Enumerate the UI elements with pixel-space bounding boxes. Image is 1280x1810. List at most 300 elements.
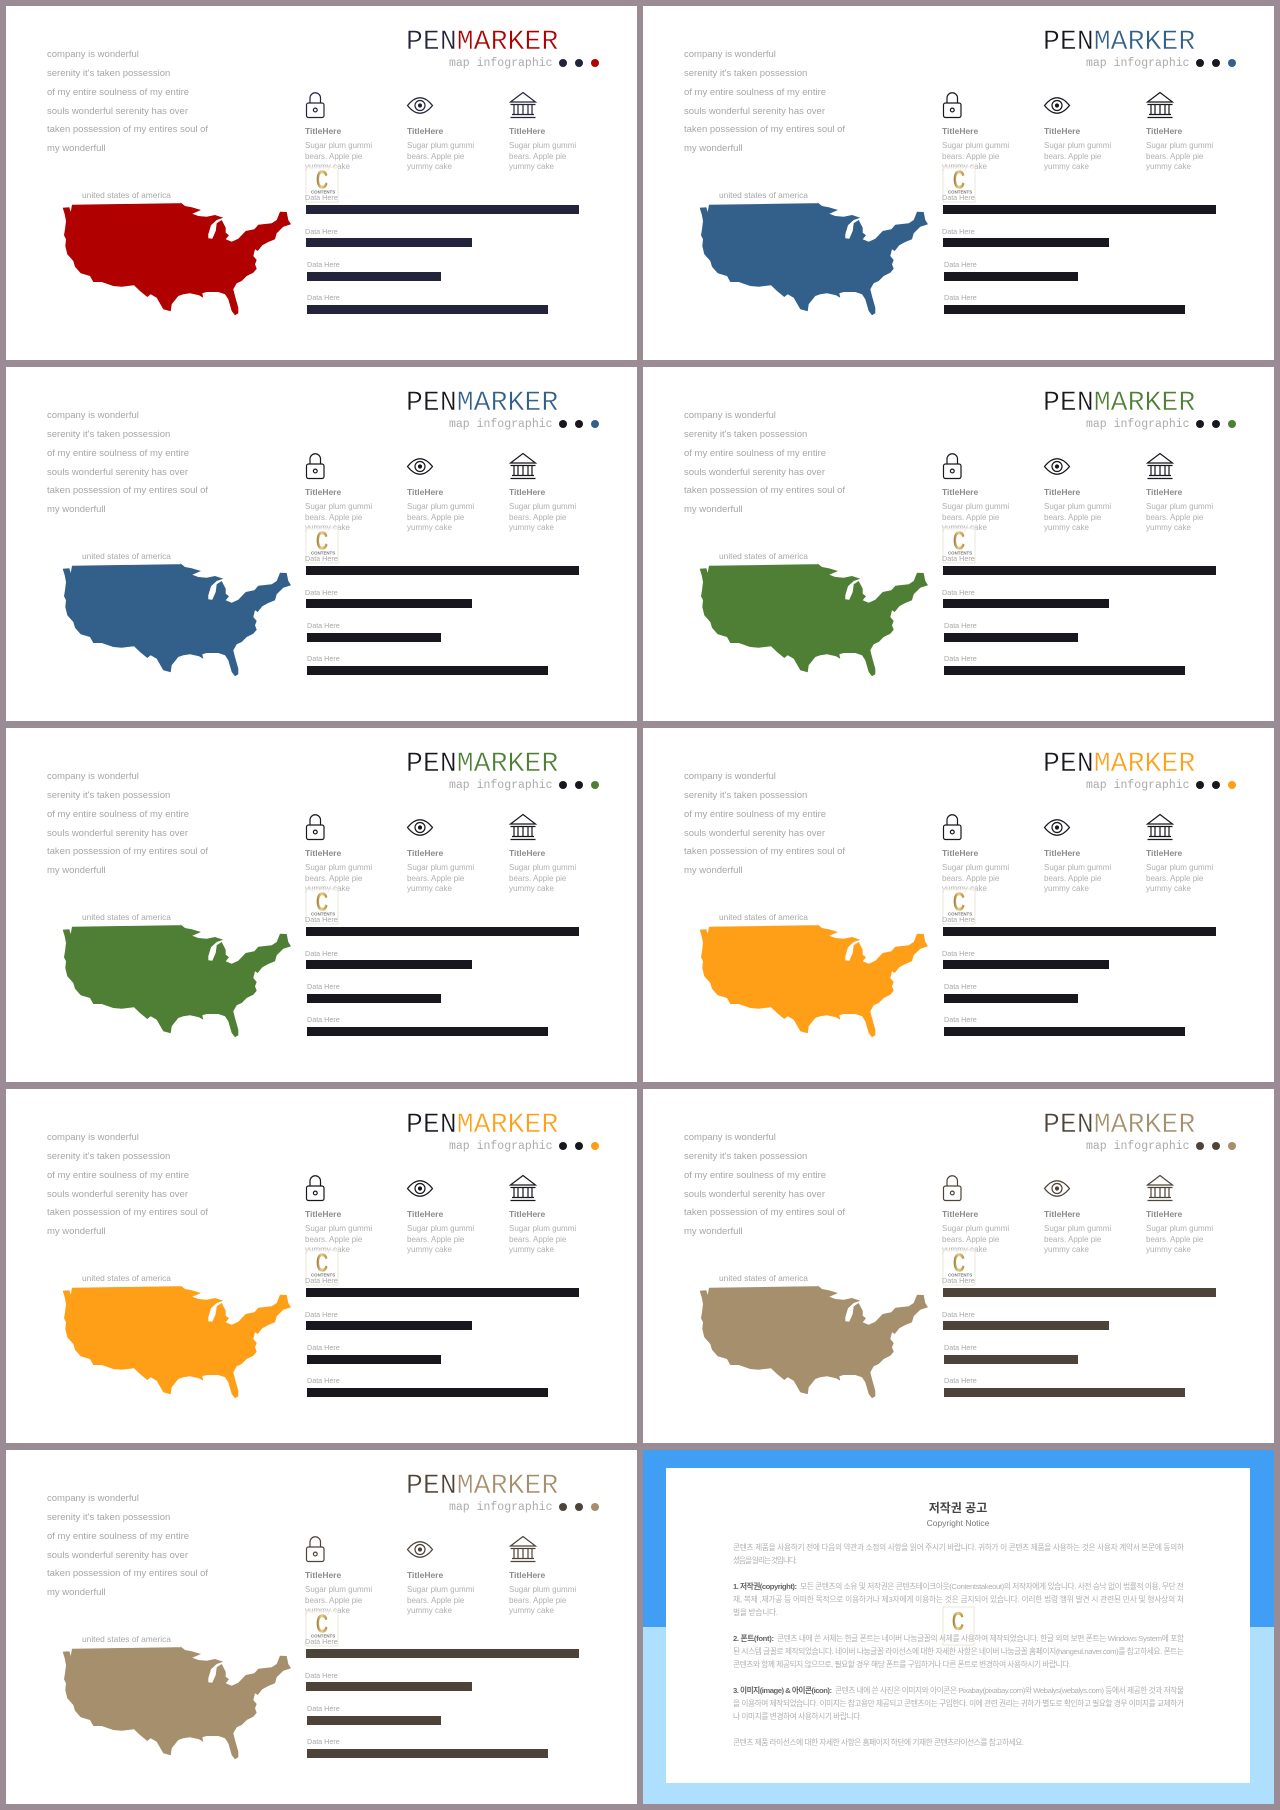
colour dots xyxy=(559,1142,599,1150)
panel: red slide xyxy=(6,6,637,360)
column: lock text: TitleHere xyxy=(305,848,341,858)
intro text: souls wonderful serenity has over xyxy=(47,467,188,478)
column: eye text: Sugar plum gummi xyxy=(407,1585,474,1594)
column: lock text: bears. Apple pie xyxy=(942,874,1000,883)
intro text: serenity it's taken possession xyxy=(684,1151,807,1162)
bar chart: Data Here xyxy=(305,1276,338,1285)
bar chart xyxy=(305,915,579,1036)
column: lock text: yummy cake xyxy=(942,1245,987,1254)
intro text xyxy=(47,1132,208,1237)
intro text: of my entire soulness of my entire xyxy=(684,809,826,820)
icon: lock xyxy=(944,454,961,478)
stamp xyxy=(943,887,975,924)
column: bank text: yummy cake xyxy=(1146,1245,1191,1254)
bar chart: Data Here xyxy=(942,1310,975,1319)
panel: blue slide, left xyxy=(6,367,637,721)
title: PENMARKER xyxy=(1043,749,1195,780)
bar chart: Data Here xyxy=(307,1015,340,1024)
title: PENMARKER xyxy=(406,1110,558,1141)
intro text: of my entire soulness of my entire xyxy=(47,809,189,820)
column: bank text: yummy cake xyxy=(1146,884,1191,893)
column: lock text: bears. Apple pie xyxy=(942,1235,1000,1244)
column: lock text: bears. Apple pie xyxy=(305,874,363,883)
bar chart: Data Here xyxy=(305,588,338,597)
bar chart xyxy=(305,554,579,675)
intro text: serenity it's taken possession xyxy=(684,68,807,79)
icon: bank xyxy=(1148,814,1172,840)
map label: united states of america xyxy=(82,1273,171,1283)
column: bank text: yummy cake xyxy=(509,162,554,171)
bar chart: Data Here xyxy=(305,949,338,958)
notice section 1 xyxy=(733,1581,1184,1617)
column: bank text: yummy cake xyxy=(1146,162,1191,171)
bar chart: Data Here xyxy=(942,227,975,236)
subtitle: map infographic xyxy=(1086,1140,1190,1153)
column: lock text: TitleHere xyxy=(305,1570,341,1580)
bar chart: Data Here xyxy=(942,193,975,202)
map label: united states of america xyxy=(82,1634,171,1644)
intro text: taken possession of my entires soul of xyxy=(684,846,845,857)
column: lock text: yummy cake xyxy=(305,523,350,532)
map label: united states of america xyxy=(719,190,808,200)
icon: bank xyxy=(1148,92,1172,118)
column: eye text: TitleHere xyxy=(407,1570,443,1580)
column: lock text xyxy=(305,848,372,893)
column: lock text: yummy cake xyxy=(942,523,987,532)
bar chart: Data Here xyxy=(944,1376,977,1385)
bar chart: Data Here xyxy=(942,554,975,563)
subtitle: map infographic xyxy=(449,1140,553,1153)
column: bank text: yummy cake xyxy=(509,884,554,893)
column: lock text: yummy cake xyxy=(305,884,350,893)
bar chart xyxy=(305,1637,579,1758)
stamp: CONTENTS xyxy=(311,1272,335,1278)
intro text: souls wonderful serenity has over xyxy=(684,106,825,117)
bar chart: Data Here xyxy=(307,1737,340,1746)
map: united states xyxy=(700,1285,928,1398)
column: eye text: bears. Apple pie xyxy=(407,152,465,161)
column: bank text xyxy=(509,487,576,532)
icon: lock xyxy=(944,1176,961,1200)
column: eye text: yummy cake xyxy=(1044,884,1089,893)
icon: eye xyxy=(408,820,432,835)
column: lock text: yummy cake xyxy=(942,162,987,171)
column: lock text: bears. Apple pie xyxy=(305,1596,363,1605)
intro text: taken possession of my entires soul of xyxy=(47,1568,208,1579)
column: eye text xyxy=(1044,126,1111,171)
column: lock text: TitleHere xyxy=(305,1209,341,1219)
stamp: CONTENTS xyxy=(311,1634,335,1638)
intro text: souls wonderful serenity has over xyxy=(47,1189,188,1200)
intro text: my wonderfull xyxy=(684,143,743,154)
column: bank text: TitleHere xyxy=(1146,487,1182,497)
column: bank text xyxy=(509,126,576,171)
column: bank text: Sugar plum gummi xyxy=(509,502,576,511)
stamp xyxy=(943,1606,974,1645)
icon: bank xyxy=(510,1176,536,1200)
intro text: serenity it's taken possession xyxy=(684,790,807,801)
intro text: serenity it's taken possession xyxy=(47,790,170,801)
column: eye text: bears. Apple pie xyxy=(1044,152,1102,161)
column: bank text: bears. Apple pie xyxy=(509,1235,567,1244)
column: bank text: bears. Apple pie xyxy=(1146,152,1204,161)
icon: eye xyxy=(408,1542,432,1557)
map label: united states of america xyxy=(82,551,171,561)
column: lock text: bears. Apple pie xyxy=(942,513,1000,522)
icon: bank xyxy=(510,92,536,118)
stamp xyxy=(943,165,975,202)
colour dots xyxy=(1196,781,1236,789)
column: bank text: Sugar plum gummi xyxy=(509,1585,576,1594)
icon: eye xyxy=(408,1181,432,1196)
map: united states xyxy=(63,1646,291,1759)
column: eye text: bears. Apple pie xyxy=(407,513,465,522)
notice intro: 콘텐츠 제품을 사용하기 전에 다음의 약관과 소정의 사항을 읽어 주시기 바랍니다. 귀하가 이 콘텐츠 제품을 사용하는 것은 사용자 계약서 본문에 동의하 xyxy=(733,1542,1184,1552)
bar chart xyxy=(942,915,1216,1036)
column: bank text: TitleHere xyxy=(1146,848,1182,858)
intro text: my wonderfull xyxy=(47,1587,106,1598)
intro text xyxy=(684,49,845,154)
stamp: C xyxy=(316,887,328,916)
bar chart: Data Here xyxy=(942,588,975,597)
column: lock text: TitleHere xyxy=(305,487,341,497)
bar chart: Data Here xyxy=(305,227,338,236)
intro text: company is wonderful xyxy=(684,410,776,421)
intro text: souls wonderful serenity has over xyxy=(684,828,825,839)
column: bank text: yummy cake xyxy=(509,523,554,532)
column: eye text: yummy cake xyxy=(407,884,452,893)
column: bank text: TitleHere xyxy=(509,1209,545,1219)
intro text: company is wonderful xyxy=(47,410,139,421)
intro text xyxy=(47,410,208,515)
icon: lock xyxy=(306,1537,324,1562)
column: bank text: bears. Apple pie xyxy=(509,513,567,522)
column: bank text: Sugar plum gummi xyxy=(1146,502,1213,511)
icon: eye xyxy=(1044,1181,1070,1196)
intro text: of my entire soulness of my entire xyxy=(684,1170,826,1181)
icon: bank xyxy=(510,1536,536,1562)
bar chart: Data Here xyxy=(307,982,340,991)
column: eye text: yummy cake xyxy=(1044,523,1089,532)
intro text: of my entire soulness of my entire xyxy=(47,1531,189,1542)
column: bank text: yummy cake xyxy=(1146,523,1191,532)
stamp xyxy=(306,1248,338,1285)
notice section 3: 나 이미지를 변경하여 사용하시기 바랍니다. xyxy=(733,1711,862,1721)
intro text: of my entire soulness of my entire xyxy=(47,1170,189,1181)
column: bank text xyxy=(1146,126,1213,171)
column: eye text: TitleHere xyxy=(407,126,443,136)
column: eye text: TitleHere xyxy=(1044,848,1080,858)
map: united states xyxy=(63,563,291,676)
stamp: C xyxy=(952,1606,964,1636)
column: eye text: yummy cake xyxy=(1044,1245,1089,1254)
bar chart: Data Here xyxy=(307,1343,340,1352)
column: lock text: Sugar plum gummi xyxy=(305,863,372,872)
column: lock text xyxy=(942,126,1009,171)
intro text: company is wonderful xyxy=(47,1132,139,1143)
notice section 3: 을 이용하여 제작되었습니다. 이미지는 참고용만 제공되고 콘텐츠이는 구입한다. 이에 관련 권리는 귀하가 별도로 확인하고 필요할 경우 이미지를 교체하거 xyxy=(733,1698,1184,1708)
column: eye text: bears. Apple pie xyxy=(407,1235,465,1244)
icon: eye xyxy=(408,98,432,113)
intro text: of my entire soulness of my entire xyxy=(684,448,826,459)
icon: bank xyxy=(510,814,536,840)
bar chart: Data Here xyxy=(307,293,340,302)
panel: green slide, left xyxy=(6,728,637,1082)
column: eye text xyxy=(407,1570,474,1615)
bar chart xyxy=(942,554,1216,675)
column: bank text: bears. Apple pie xyxy=(509,152,567,161)
column: lock text xyxy=(942,848,1009,893)
column: bank text: bears. Apple pie xyxy=(509,1596,567,1605)
column: bank text: TitleHere xyxy=(1146,1209,1182,1219)
bar chart: Data Here xyxy=(944,260,977,269)
bar chart: Data Here xyxy=(942,949,975,958)
column: bank text: yummy cake xyxy=(509,1606,554,1615)
column: eye text xyxy=(1044,1209,1111,1254)
intro text: my wonderfull xyxy=(47,504,106,515)
panel: orange slide, right xyxy=(643,728,1274,1082)
intro text: taken possession of my entires soul of xyxy=(684,124,845,135)
colour dots xyxy=(559,420,599,428)
stamp: C xyxy=(953,887,965,916)
notice section 2: 2. 폰트(font): xyxy=(733,1634,774,1643)
column: eye text: Sugar plum gummi xyxy=(407,141,474,150)
icon: eye xyxy=(1044,459,1070,474)
notice closing line: 콘텐츠 제품 라이선스에 대한 자세한 사항은 홈페이지 하단에 기재한 콘텐츠라이선스를 참고하세요. xyxy=(733,1737,1024,1747)
bar chart xyxy=(305,1276,579,1397)
bar chart: Data Here xyxy=(944,654,977,663)
notice subheading: Copyright Notice xyxy=(927,1518,990,1528)
map: united states xyxy=(700,563,928,676)
column: eye text: bears. Apple pie xyxy=(407,1596,465,1605)
column: bank text: TitleHere xyxy=(509,848,545,858)
notice heading: 저작권 공고 xyxy=(929,1500,987,1515)
intro text: my wonderfull xyxy=(684,865,743,876)
map label: united states of america xyxy=(719,1273,808,1283)
intro text: serenity it's taken possession xyxy=(47,68,170,79)
map: united states xyxy=(700,202,928,315)
column: eye text: TitleHere xyxy=(1044,487,1080,497)
intro text: taken possession of my entires soul of xyxy=(684,485,845,496)
panel: tan slide, right xyxy=(643,1089,1274,1443)
column: eye text: yummy cake xyxy=(407,162,452,171)
stamp xyxy=(943,526,975,563)
column: bank text: Sugar plum gummi xyxy=(1146,863,1213,872)
notice section 2: 된 시스템 글꼴로 제작되었습니다. 네이버 나눔글꼴 라이선스에 대한 자세한 사항은 네이버 나눔글꼴 홈페이지(hangeul.naver.com)를 참고하세요. 폰트는 xyxy=(733,1646,1184,1656)
column: bank text: Sugar plum gummi xyxy=(509,863,576,872)
column: lock text: yummy cake xyxy=(305,162,350,171)
intro text: my wonderfull xyxy=(47,143,106,154)
colour dots xyxy=(1196,1142,1236,1150)
icon: lock xyxy=(944,93,961,118)
map label: united states of america xyxy=(82,190,171,200)
stamp: CONTENTS xyxy=(311,190,335,194)
bar chart: Data Here xyxy=(307,260,340,269)
stamp: C xyxy=(953,1248,965,1277)
bar chart: Data Here xyxy=(944,1015,977,1024)
column: bank text xyxy=(509,1209,576,1254)
column: lock text: bears. Apple pie xyxy=(942,152,1000,161)
intro text: my wonderfull xyxy=(684,504,743,515)
stamp xyxy=(306,1609,338,1646)
column: eye text: bears. Apple pie xyxy=(1044,1235,1102,1244)
title: PENMARKER xyxy=(406,388,558,419)
bar chart: Data Here xyxy=(305,1671,338,1680)
colour dots xyxy=(559,1503,599,1511)
subtitle: map infographic xyxy=(1086,418,1190,431)
bar chart: Data Here xyxy=(942,1276,975,1285)
column: lock text xyxy=(942,1209,1009,1254)
intro text: taken possession of my entires soul of xyxy=(47,485,208,496)
column: eye text xyxy=(1044,848,1111,893)
subtitle: map infographic xyxy=(1086,779,1190,792)
icon: eye xyxy=(1044,98,1070,113)
intro text: souls wonderful serenity has over xyxy=(684,467,825,478)
map label: united states of america xyxy=(82,912,171,922)
column: lock text xyxy=(305,487,372,532)
column: bank text: TitleHere xyxy=(509,126,545,136)
title: PENMARKER xyxy=(1043,388,1195,419)
column: lock text: TitleHere xyxy=(942,1209,978,1219)
intro text xyxy=(684,1132,845,1237)
stamp xyxy=(306,165,338,202)
intro text: company is wonderful xyxy=(684,1132,776,1143)
notice section 3: 3. 이미지(image) & 아이콘(icon): xyxy=(733,1685,832,1695)
intro text: company is wonderful xyxy=(47,1493,139,1504)
icon: lock xyxy=(944,815,961,840)
column: bank text: Sugar plum gummi xyxy=(1146,1224,1213,1233)
bar chart: Data Here xyxy=(307,654,340,663)
column: eye text: yummy cake xyxy=(407,1606,452,1615)
icon: lock xyxy=(306,815,324,840)
notice section 1: 모든 콘텐츠의 소유 및 저작권은 콘텐츠테이크아웃(Contentstakeout)의 저작자에게 있습니다. 사전 승낙 없이 법률적 이용, 무단 전 xyxy=(800,1581,1184,1591)
intro text: of my entire soulness of my entire xyxy=(684,87,826,98)
column: lock text: TitleHere xyxy=(305,126,341,136)
bar chart: Data Here xyxy=(305,554,338,563)
stamp: CONTENTS xyxy=(311,550,335,556)
column: eye text: yummy cake xyxy=(407,523,452,532)
title: PENMARKER xyxy=(406,749,558,780)
intro text: my wonderfull xyxy=(684,1226,743,1237)
column: eye text xyxy=(1044,487,1111,532)
bar chart xyxy=(305,193,579,314)
title: PENMARKER xyxy=(406,1471,558,1502)
subtitle: map infographic xyxy=(1086,57,1190,70)
bar chart: Data Here xyxy=(307,1376,340,1385)
stamp: CONTENTS xyxy=(311,912,335,916)
column: lock text: TitleHere xyxy=(942,848,978,858)
notice section 2 xyxy=(733,1633,1184,1669)
column: lock text: Sugar plum gummi xyxy=(305,1224,372,1233)
icon: lock xyxy=(306,93,324,118)
icon: eye xyxy=(408,459,432,474)
intro text: souls wonderful serenity has over xyxy=(47,1550,188,1561)
column: eye text: Sugar plum gummi xyxy=(1044,141,1111,150)
intro text xyxy=(47,1493,208,1598)
intro text: company is wonderful xyxy=(47,49,139,60)
notice section 2: 콘텐츠 내에 쓴 서체는 한글 폰트는 네이버 나눔글꼴의 서체를 사용하여 제작되었습니다. 한글 외의 보편 폰트는 Windows System에 포함 xyxy=(777,1633,1184,1643)
intro text xyxy=(47,49,208,154)
stamp: CONTENTS xyxy=(948,1272,972,1278)
bar chart: Data Here xyxy=(307,1704,340,1713)
notice intro: 셨음을 알리는 것입니다. xyxy=(733,1555,797,1565)
intro text: of my entire soulness of my entire xyxy=(47,87,189,98)
column: eye text: Sugar plum gummi xyxy=(1044,502,1111,511)
column: lock text: Sugar plum gummi xyxy=(942,1224,1009,1233)
notice section 1: 벌을 받습니다. xyxy=(733,1607,778,1617)
column: eye text xyxy=(407,126,474,171)
stamp xyxy=(306,526,338,563)
colour dots xyxy=(1196,420,1236,428)
column: bank text xyxy=(509,848,576,893)
column: bank text: bears. Apple pie xyxy=(1146,1235,1204,1244)
intro text xyxy=(47,771,208,876)
map label: united states of america xyxy=(719,551,808,561)
panel: copyright notice xyxy=(643,1450,1274,1804)
stamp xyxy=(306,887,338,924)
column: eye text: bears. Apple pie xyxy=(1044,874,1102,883)
map: united states xyxy=(63,202,291,315)
column: eye text: TitleHere xyxy=(1044,126,1080,136)
column: eye text: TitleHere xyxy=(1044,1209,1080,1219)
column: eye text: Sugar plum gummi xyxy=(1044,1224,1111,1233)
stamp: CONTENTS xyxy=(948,190,972,194)
intro text: company is wonderful xyxy=(684,49,776,60)
column: lock text xyxy=(305,1209,372,1254)
subtitle: map infographic xyxy=(449,779,553,792)
colour dots xyxy=(559,781,599,789)
bar chart: Data Here xyxy=(305,193,338,202)
icon: lock xyxy=(306,1176,324,1200)
column: eye text: Sugar plum gummi xyxy=(407,863,474,872)
notice card xyxy=(666,1468,1250,1783)
column: bank text: TitleHere xyxy=(509,1570,545,1580)
stamp: C xyxy=(316,1248,328,1277)
stamp: C xyxy=(316,1609,328,1638)
title: PENMARKER xyxy=(1043,1110,1195,1141)
column: bank text: TitleHere xyxy=(1146,126,1182,136)
bar chart: Data Here xyxy=(307,621,340,630)
intro text: taken possession of my entires soul of xyxy=(47,1207,208,1218)
panel: blue slide, right xyxy=(643,6,1274,360)
notice section 3 xyxy=(733,1685,1184,1721)
column: bank text: bears. Apple pie xyxy=(509,874,567,883)
intro text: serenity it's taken possession xyxy=(47,1512,170,1523)
bar chart: Data Here xyxy=(944,621,977,630)
column: bank text: Sugar plum gummi xyxy=(1146,141,1213,150)
icon: eye xyxy=(1044,820,1070,835)
column: bank text: TitleHere xyxy=(509,487,545,497)
bar chart: Data Here xyxy=(305,1637,338,1646)
intro text: souls wonderful serenity has over xyxy=(47,828,188,839)
column: bank text: bears. Apple pie xyxy=(1146,874,1204,883)
column: lock text: bears. Apple pie xyxy=(305,513,363,522)
column: bank text: bears. Apple pie xyxy=(1146,513,1204,522)
icon: lock xyxy=(306,454,324,478)
bar chart: Data Here xyxy=(944,982,977,991)
column: lock text: Sugar plum gummi xyxy=(942,141,1009,150)
column: eye text: Sugar plum gummi xyxy=(407,1224,474,1233)
notice intro xyxy=(733,1542,1184,1565)
column: lock text: Sugar plum gummi xyxy=(305,141,372,150)
intro text: souls wonderful serenity has over xyxy=(47,106,188,117)
column: eye text xyxy=(407,487,474,532)
intro text: of my entire soulness of my entire xyxy=(47,448,189,459)
intro text xyxy=(684,771,845,876)
column: eye text: yummy cake xyxy=(1044,162,1089,171)
panel: tan slide, left xyxy=(6,1450,637,1804)
subtitle: map infographic xyxy=(449,1501,553,1514)
